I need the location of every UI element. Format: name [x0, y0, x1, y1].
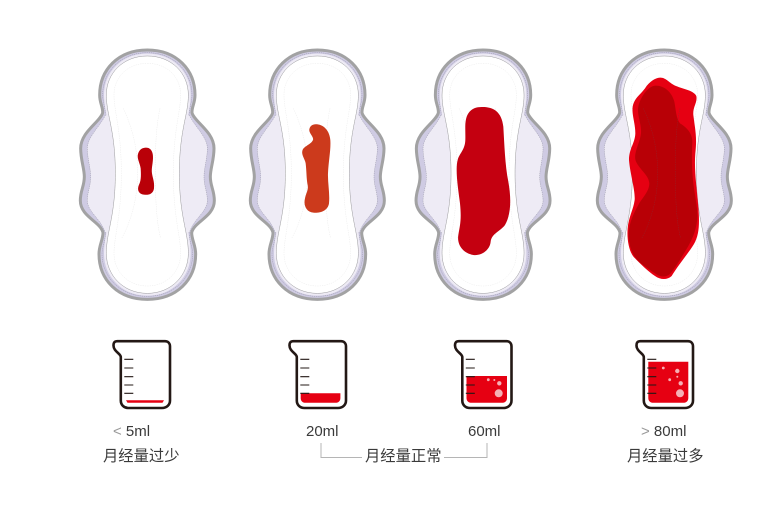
stain: small	[138, 148, 154, 195]
label: normal flow: 月经量正常	[365, 448, 442, 465]
panel: pad with 60ml stain	[416, 50, 550, 299]
liquid level	[648, 362, 688, 403]
stain: inner dark	[629, 86, 697, 276]
liquid level	[466, 376, 507, 403]
panel: pad with spotting under 5ml	[80, 50, 214, 299]
beaker: under 5ml	[114, 341, 170, 408]
liquid level	[126, 400, 164, 403]
bubbles	[487, 378, 503, 397]
bubbles	[662, 367, 684, 397]
stain: medium	[302, 124, 330, 213]
bracket: normal range	[321, 443, 487, 458]
label: under 5ml: < 5ml	[113, 423, 150, 440]
label: over 80ml: > 80ml	[641, 423, 686, 440]
stain: large	[457, 107, 510, 255]
beaker: 20ml	[290, 341, 346, 408]
label: low flow: 月经量过少	[103, 448, 180, 465]
label: 20ml: 20ml	[306, 423, 339, 440]
beaker: 60ml	[455, 341, 512, 408]
panel: pad with 20ml stain	[250, 50, 384, 299]
panel: pad with over 80ml stain	[597, 50, 731, 299]
liquid level	[301, 393, 340, 403]
stain: outer bright	[627, 78, 699, 279]
beaker: over 80ml	[636, 341, 693, 408]
label: 60ml: 60ml	[468, 423, 501, 440]
label: high flow: 月经量过多	[627, 448, 704, 465]
